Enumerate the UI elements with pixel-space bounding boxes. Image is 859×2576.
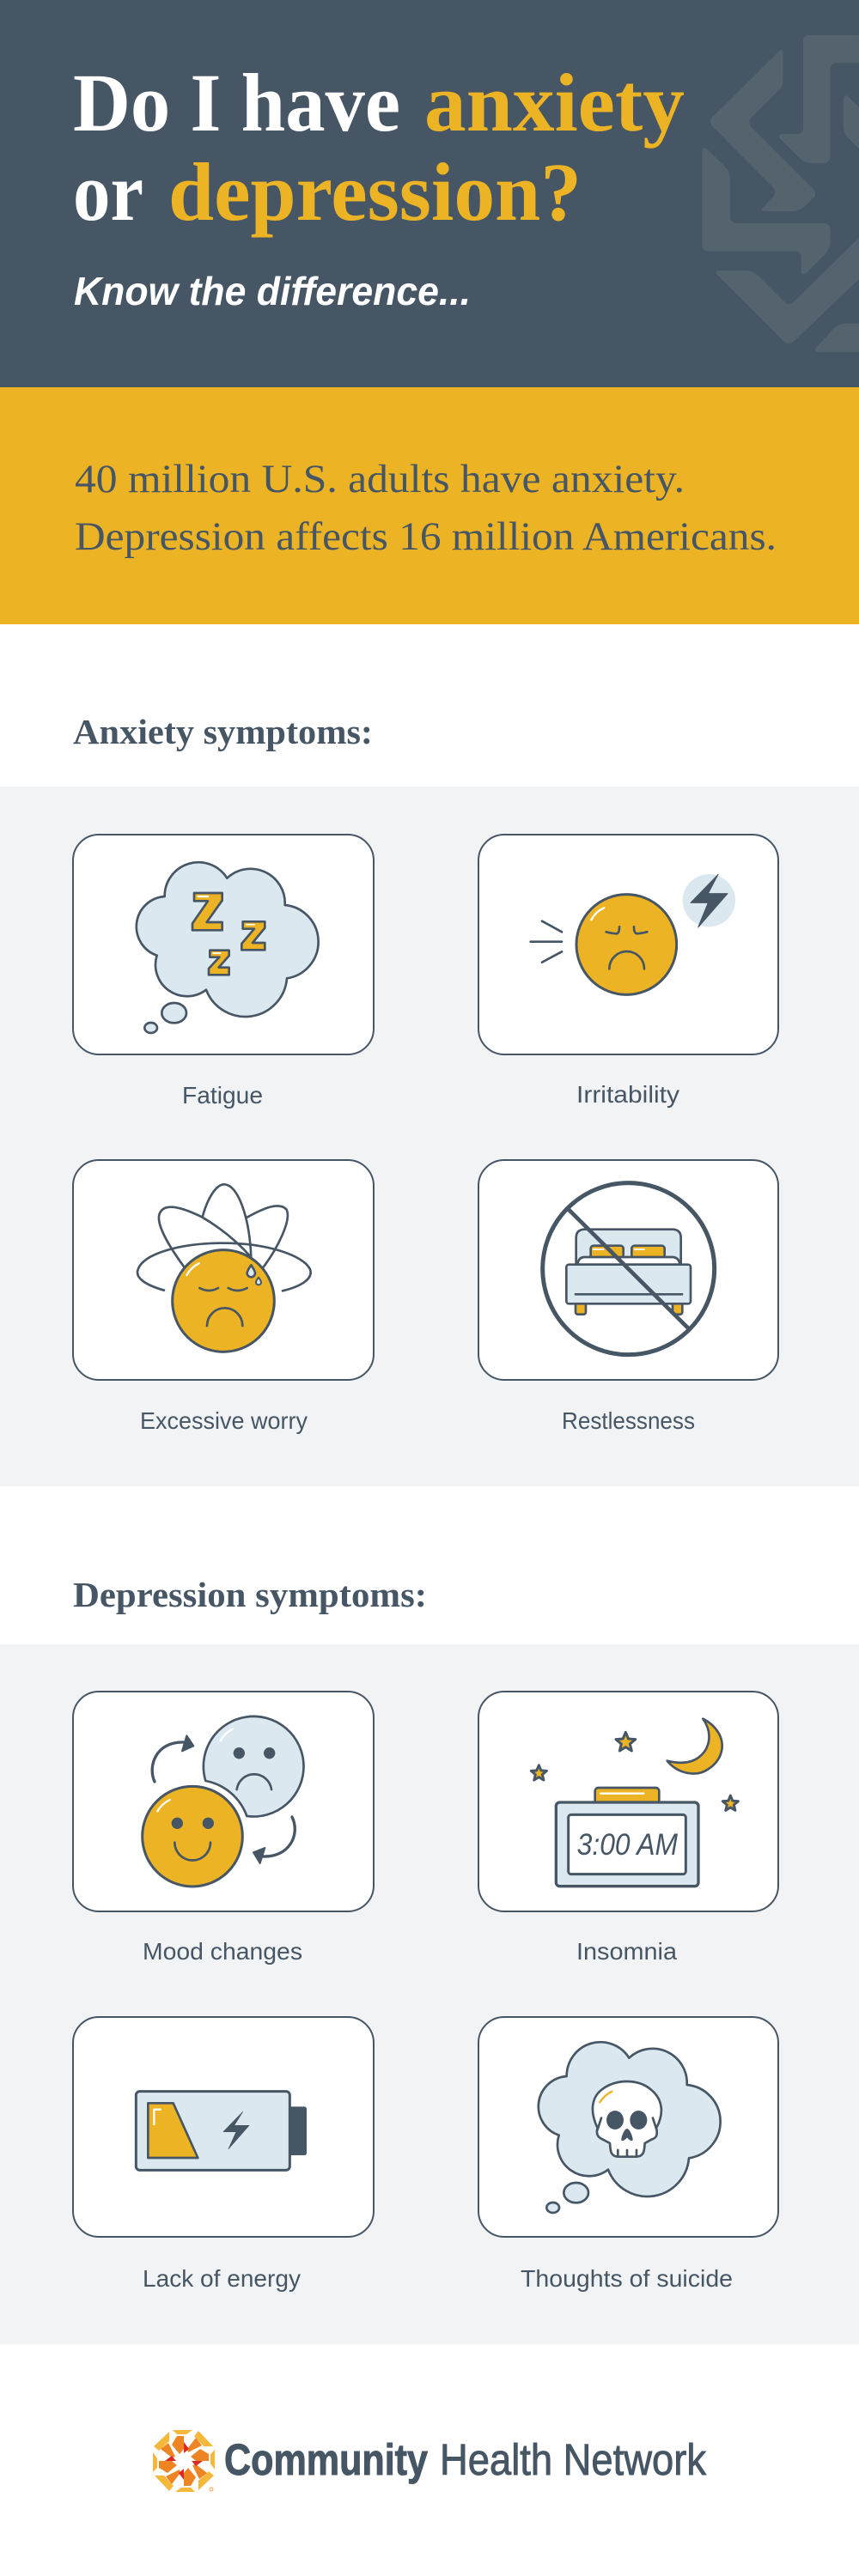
icon: crossed out bed xyxy=(543,1183,715,1355)
title: or xyxy=(73,146,143,238)
statistics banner xyxy=(0,387,859,624)
watermark logo xyxy=(702,35,859,352)
heading: anxiety symptoms: Anxiety symptoms: xyxy=(73,712,373,751)
label: thoughts of suicide: Thoughts of suicide xyxy=(521,2265,733,2292)
label: insomnia: Insomnia xyxy=(576,1938,677,1965)
icon: happy and sad faces with arrows xyxy=(143,1716,304,1886)
statistic text: Depression affects 16 million Americans. xyxy=(75,514,777,559)
label: lack of energy: Lack of energy xyxy=(143,2265,301,2292)
label: mood changes: Mood changes xyxy=(143,1938,302,1965)
subtitle: Know the difference... xyxy=(74,269,471,313)
card: insomnia xyxy=(478,1692,778,1965)
label: excessive worry: Excessive worry xyxy=(140,1407,308,1434)
icon: alarm clock with moon and stars xyxy=(531,1719,738,1886)
card: fatigue xyxy=(73,835,374,1109)
icon: irritated face with lightning bolt xyxy=(531,874,735,994)
label: restlessness: Restlessness xyxy=(562,1407,695,1434)
card: excessive worry xyxy=(73,1160,374,1434)
statistic text xyxy=(75,457,777,559)
label: irritability: Irritability xyxy=(576,1081,679,1108)
card: restlessness xyxy=(478,1160,778,1434)
header panel xyxy=(0,0,859,387)
card: thoughts of suicide xyxy=(478,2017,778,2292)
logo wordmark xyxy=(224,2435,706,2484)
panel: depression symptoms xyxy=(0,1644,859,2344)
statistic text: 40 million U.S. adults have anxiety. xyxy=(75,457,685,501)
card: irritability xyxy=(478,835,778,1108)
logo wordmark: Community xyxy=(224,2435,429,2484)
footer logo: Community Health Network xyxy=(153,2430,706,2492)
card: mood changes xyxy=(73,1692,374,1965)
title: Do I have xyxy=(73,57,400,149)
icon: worried face with orbits xyxy=(137,1184,311,1352)
heading: depression symptoms: Depression symptoms: xyxy=(73,1575,427,1614)
logo mark xyxy=(153,2430,215,2492)
icon: low battery xyxy=(136,2092,307,2170)
title: anxiety xyxy=(424,57,685,149)
title xyxy=(73,57,685,238)
icon: alarm clock with moon and stars: 3:00 AM xyxy=(577,1828,679,1862)
label: fatigue: Fatigue xyxy=(182,1082,263,1109)
title: depression? xyxy=(168,146,582,238)
logo wordmark: Health Network xyxy=(440,2435,706,2484)
icon: sleepy thought cloud xyxy=(137,862,319,1033)
card: lack of energy xyxy=(73,2017,374,2292)
icon: skull in thought cloud xyxy=(539,2042,721,2213)
panel: anxiety symptoms xyxy=(0,787,859,1486)
